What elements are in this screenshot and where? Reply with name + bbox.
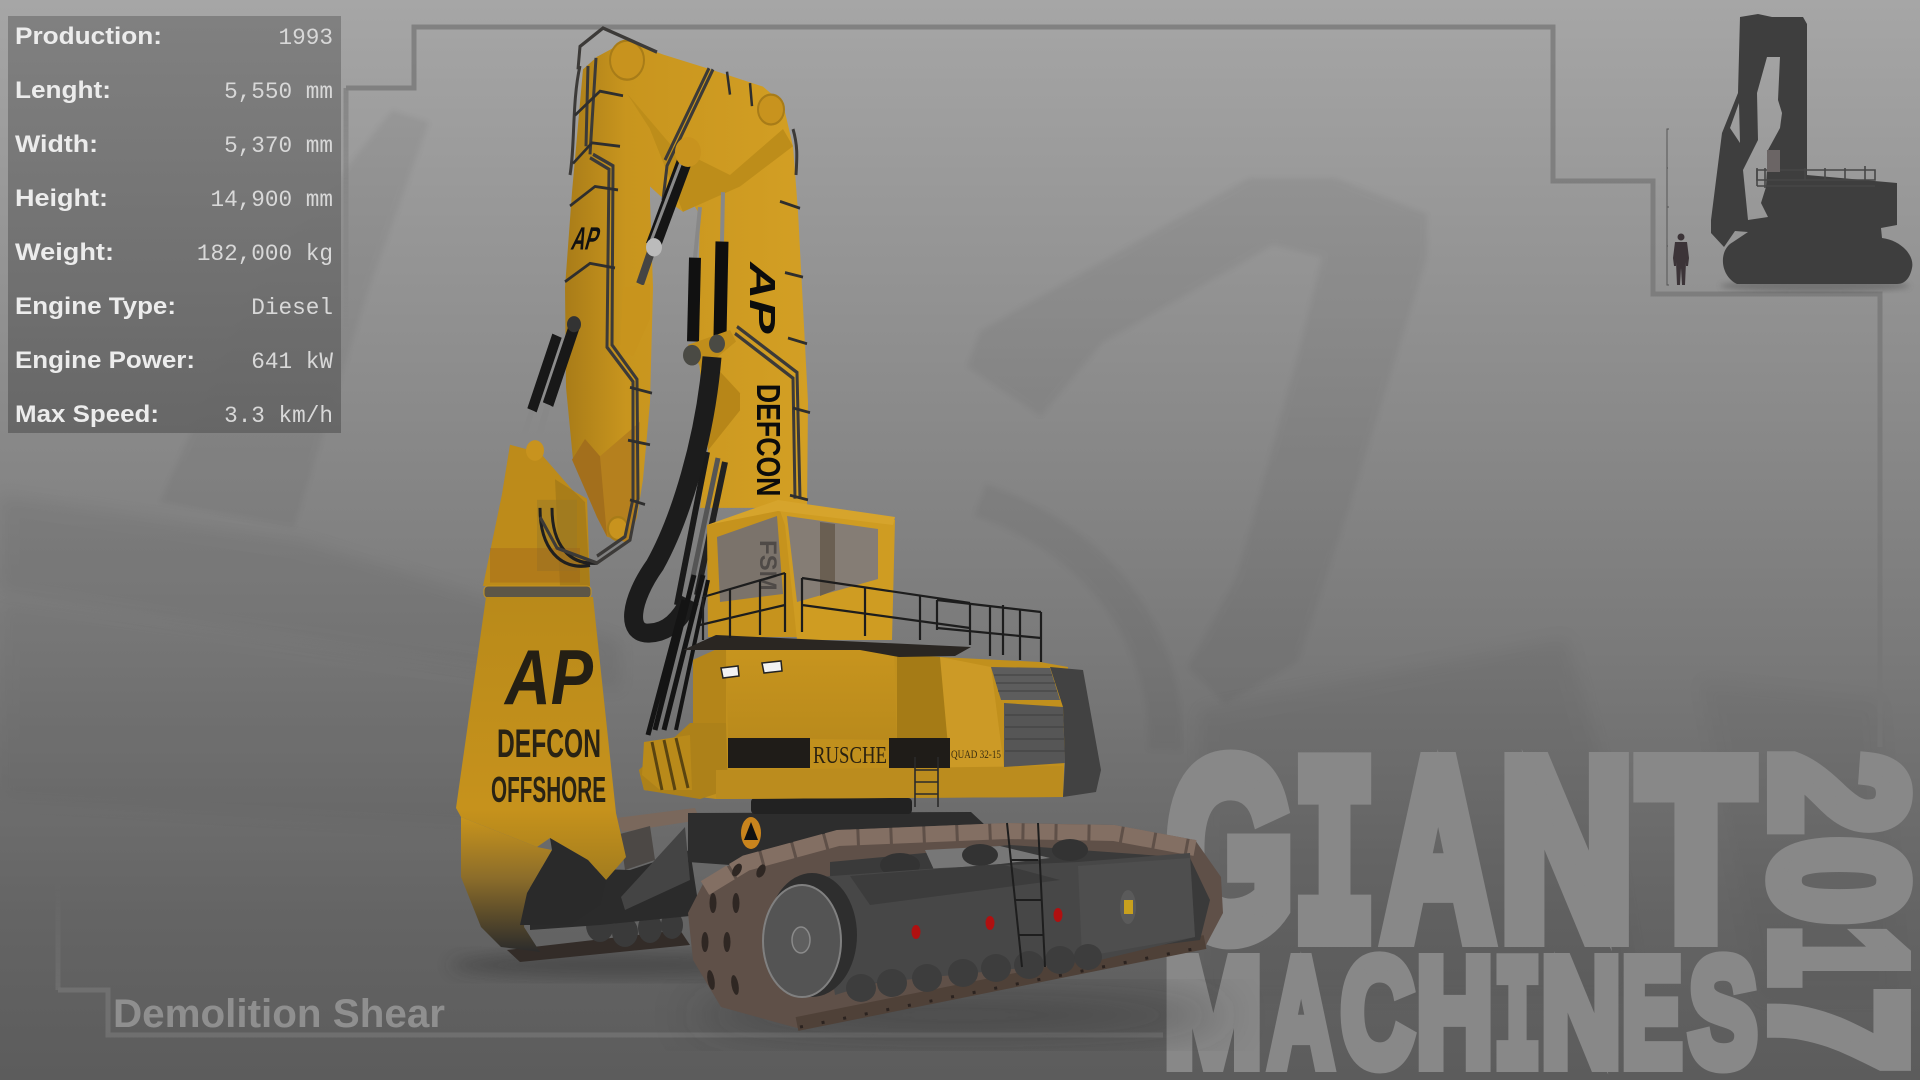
title word: MACHINES	[1164, 926, 1757, 1080]
grill	[991, 667, 1060, 700]
spec: max speed: 3.3 km/h	[224, 403, 333, 429]
spec: height	[15, 185, 333, 213]
track ladder	[1007, 823, 1045, 967]
track frame hull	[818, 853, 1195, 1002]
spec: width: Width:	[15, 131, 98, 158]
spec: engine power	[15, 347, 333, 375]
side frame	[530, 827, 700, 930]
body ladder	[915, 757, 938, 807]
upper body	[639, 645, 1101, 807]
red markers	[912, 908, 1062, 939]
title year: 2017 rotated	[1735, 753, 1920, 1071]
height scale	[1667, 129, 1669, 285]
human silhouette	[1673, 234, 1689, 285]
black hose	[634, 357, 712, 633]
black band and RUSCHE label	[728, 738, 810, 768]
boom labels: AP	[568, 220, 604, 257]
silhouette shadow	[1720, 280, 1910, 292]
engine end	[1050, 667, 1101, 797]
spec: length: 5,550 mm	[224, 79, 333, 105]
spec: length	[15, 77, 333, 105]
arm cylinder	[620, 137, 701, 356]
stick cylinders	[677, 452, 725, 605]
title word: GIANT: I	[1294, 720, 1375, 1014]
machine silhouette	[1711, 14, 1912, 284]
boom cylinders	[683, 192, 736, 370]
cab	[707, 500, 895, 640]
title word: GIANT	[1167, 709, 1752, 1014]
title word: GIANT: T	[1640, 709, 1752, 989]
spec: height: 14,900 mm	[210, 187, 333, 213]
pipe clamps	[565, 72, 810, 504]
spec: height: Height:	[15, 185, 108, 212]
collar ring	[484, 586, 591, 598]
near track	[688, 823, 1223, 1028]
hydraulic bundle and fingers	[642, 575, 708, 790]
spec: production	[15, 23, 333, 51]
platform and railing	[683, 573, 1041, 662]
title word: GIANT: N	[1500, 709, 1633, 989]
spec: length: Lenght:	[15, 77, 111, 104]
boom arch: DEFCON	[750, 384, 787, 496]
spec: production: Production:	[15, 23, 162, 50]
title word: GIANT: A	[1384, 709, 1493, 989]
upper body: RUSCHE	[813, 743, 887, 769]
spec: max speed: Max Speed:	[15, 401, 159, 428]
work lights	[721, 666, 739, 678]
front sprocket disc	[763, 873, 857, 997]
title word: GIANT: G	[1167, 709, 1293, 989]
shear stencil: OFFSHORE: OFFSHORE	[491, 769, 606, 810]
far track	[507, 808, 700, 962]
size comparison: silhouette, human and scale	[1667, 14, 1912, 292]
spec: engine type: Diesel	[251, 295, 333, 321]
spec: engine power: Engine Power:	[15, 347, 195, 374]
ground shadow	[450, 952, 1230, 1033]
spec: weight: 182,000 kg	[197, 241, 333, 267]
pivot pins	[608, 41, 784, 540]
excavator	[456, 28, 1223, 1028]
machine name label: Demolition Shear	[113, 992, 445, 1036]
shear collar	[483, 445, 597, 586]
spec: max speed	[15, 401, 333, 429]
panel: specifications	[8, 16, 341, 433]
spec: weight	[15, 239, 333, 267]
spec: engine power: 641 kW	[251, 349, 333, 375]
spec: weight: Weight:	[15, 239, 114, 266]
shear attachment	[456, 586, 626, 952]
upper body: QUAD 32-15	[951, 747, 1001, 761]
shear cylinders	[523, 316, 581, 461]
boom arch	[523, 28, 810, 563]
carbody and turntable	[688, 798, 985, 870]
track inner opening	[830, 845, 1210, 990]
cab: FSM	[754, 540, 781, 591]
spec: engine type: Engine Type:	[15, 293, 176, 320]
boom arch: AP	[742, 261, 782, 334]
shear stencil: AP: AP	[503, 633, 594, 721]
cab windows	[717, 516, 783, 602]
spec: production: 1993	[279, 25, 333, 51]
hydraulic pipes	[540, 28, 800, 563]
title: GIANT MACHINES 2017	[1164, 709, 1920, 1080]
boom shading	[650, 129, 740, 212]
spec: engine type	[15, 293, 333, 321]
shear blade	[456, 597, 626, 880]
spec: width	[15, 131, 333, 159]
shear stencil: DEFCON: DEFCON	[497, 722, 601, 766]
spec: width: 5,370 mm	[224, 133, 333, 159]
